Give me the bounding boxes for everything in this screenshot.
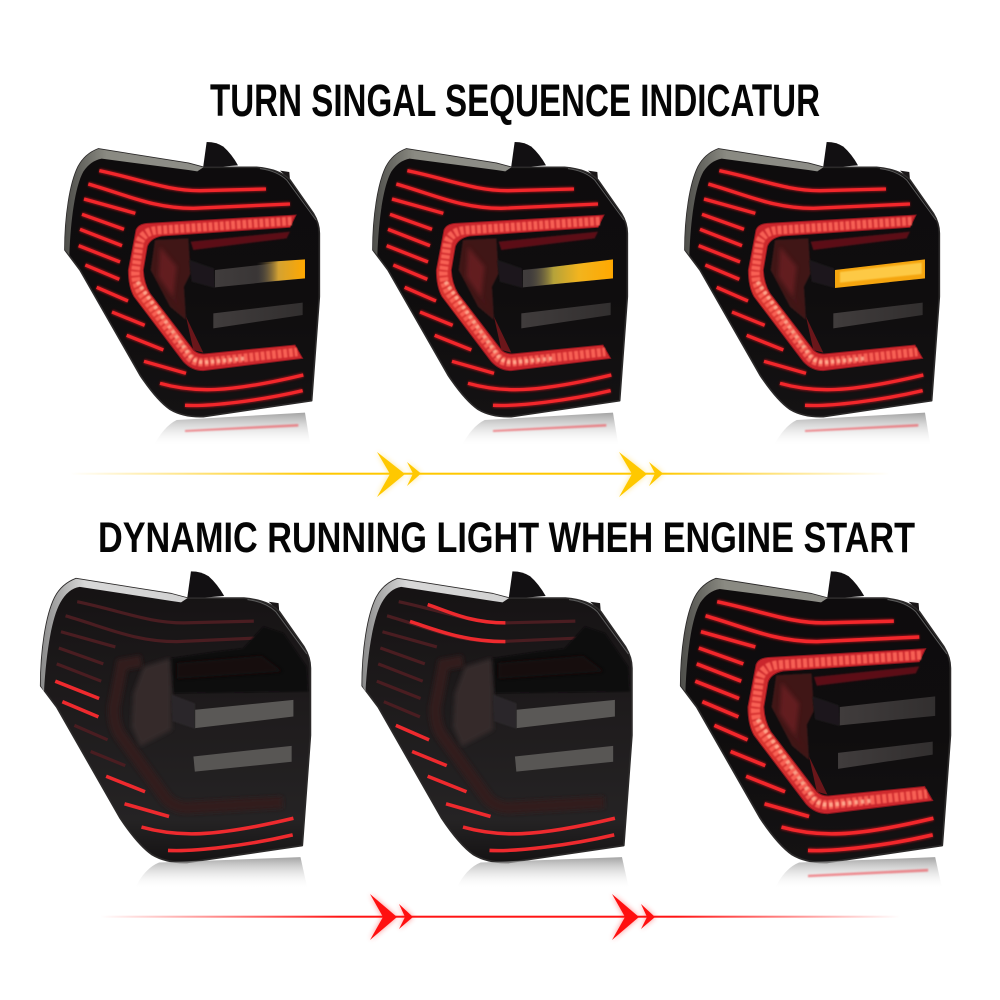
arrow: red sequence bbox=[100, 894, 900, 940]
amber segment bbox=[528, 259, 613, 287]
reflection bbox=[134, 857, 308, 889]
lit bars bbox=[55, 681, 293, 851]
tail light: running stage 3 bbox=[681, 571, 950, 889]
lit bars bbox=[396, 605, 615, 851]
tail light: turn signal stage 2 bbox=[373, 142, 627, 447]
reflection bbox=[153, 413, 311, 447]
amber segment bbox=[835, 259, 925, 288]
reflection bbox=[773, 413, 931, 447]
tail light: running stage 1 bbox=[41, 571, 310, 889]
amber segment bbox=[257, 259, 305, 283]
tail light: turn signal stage 3 bbox=[685, 142, 939, 447]
tail light: running stage 2 bbox=[362, 571, 632, 889]
tail light: turn signal stage 1 bbox=[65, 142, 319, 447]
reflection bbox=[456, 857, 629, 889]
reflection bbox=[774, 857, 942, 889]
reflection bbox=[461, 413, 619, 447]
arrow: yellow sequence bbox=[70, 452, 890, 497]
